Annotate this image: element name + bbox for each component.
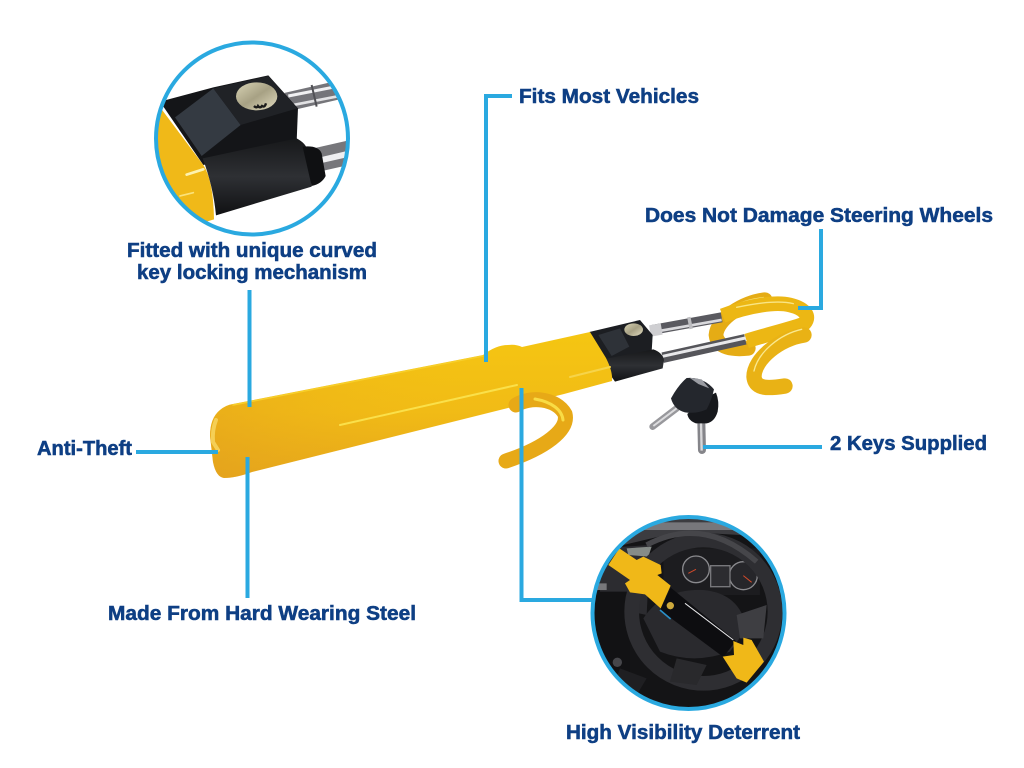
steering wheel [632, 540, 775, 683]
label: fitted with unique curved key locking mechanism: key locking mechanism [137, 262, 367, 284]
chrome rods [650, 317, 745, 358]
label: anti-theft: Anti-Theft [37, 438, 132, 460]
body shading [210, 355, 483, 478]
product: steering wheel lock [210, 298, 807, 478]
label: fitted with unique curved key locking mechanism: Fitted with unique curved [127, 240, 377, 262]
key cylinder [236, 82, 277, 110]
label: high visibility deterrent: High Visibility Deterrent [566, 722, 800, 744]
lock housing [589, 320, 664, 382]
inset: lock fitted on steering wheel [580, 515, 800, 709]
inset: curved key locking mechanism [150, 42, 353, 234]
lower hook [506, 399, 565, 461]
leader: steering wheels [798, 229, 821, 308]
label: fitted with unique curved key locking mechanism [127, 240, 377, 284]
label: 2 keys supplied: 2 Keys Supplied [830, 433, 987, 455]
leader: fits most vehicles [486, 96, 512, 362]
back hook [716, 298, 765, 349]
label: does not damage steering wheels: Does Not Damage Steering Wheels [645, 205, 993, 227]
leader: high visibility [522, 388, 595, 600]
leader: anti-theft [136, 450, 218, 454]
yellow end [158, 110, 214, 222]
instrument cluster [663, 548, 760, 595]
body highlights [213, 356, 610, 450]
cylinder [203, 138, 312, 215]
yellow end highlights [180, 169, 203, 196]
keys [653, 378, 718, 451]
label: fits most vehicles: Fits Most Vehicles [519, 86, 699, 108]
dark backing behind cube [160, 75, 298, 165]
cube [175, 88, 241, 156]
leader: locking mechanism [248, 290, 252, 407]
front hooks [723, 302, 807, 388]
lower chrome rod [317, 152, 353, 160]
dashboard [624, 519, 742, 545]
leader: hard wearing steel [246, 457, 250, 598]
label: made from hard wearing steel: Made From Hard Wearing Steel [108, 603, 416, 625]
lock shaft [660, 588, 736, 657]
lock yellow body [608, 548, 671, 608]
yellow body [210, 332, 612, 478]
gear lever [613, 658, 622, 667]
upper chrome rod [284, 83, 338, 109]
lock far end [723, 638, 764, 683]
leader: keys [703, 445, 822, 449]
